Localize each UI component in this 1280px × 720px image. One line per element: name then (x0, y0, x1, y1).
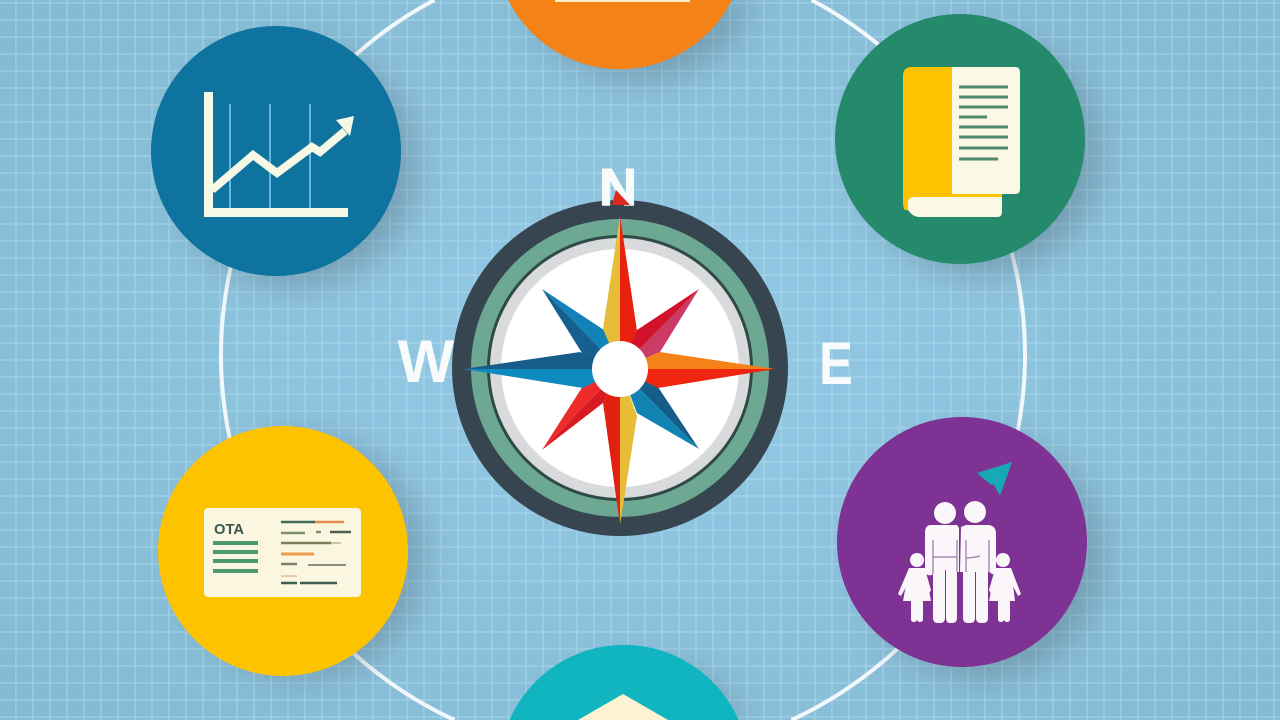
compass hub (592, 341, 648, 397)
compass rings (452, 200, 788, 536)
label: east: E (819, 330, 853, 397)
panel: family circle (837, 417, 1087, 667)
panel: travel card circle (158, 426, 408, 676)
icon: family (898, 501, 1021, 623)
icon: line chart (204, 92, 354, 217)
connecting ring (221, 0, 1025, 720)
label: north: N (599, 159, 637, 217)
icon: card (204, 508, 361, 597)
card label: OTA (214, 521, 244, 538)
icon: north marker (612, 190, 630, 205)
compass (452, 200, 788, 536)
icon: paper plane (977, 462, 1012, 496)
icon: orange circle document edge (555, 0, 690, 2)
compass star (463, 216, 775, 525)
panel: orange circle (508, 0, 732, 69)
panel: teal circle (509, 645, 739, 720)
circle shadows (176, 0, 1102, 720)
icon: teal circle envelope peak (578, 694, 668, 720)
label: west: W (398, 328, 455, 395)
panel: growth chart circle (151, 26, 401, 276)
icon: book (903, 67, 1020, 217)
card lines (213, 522, 351, 583)
panel: book circle (835, 14, 1085, 264)
